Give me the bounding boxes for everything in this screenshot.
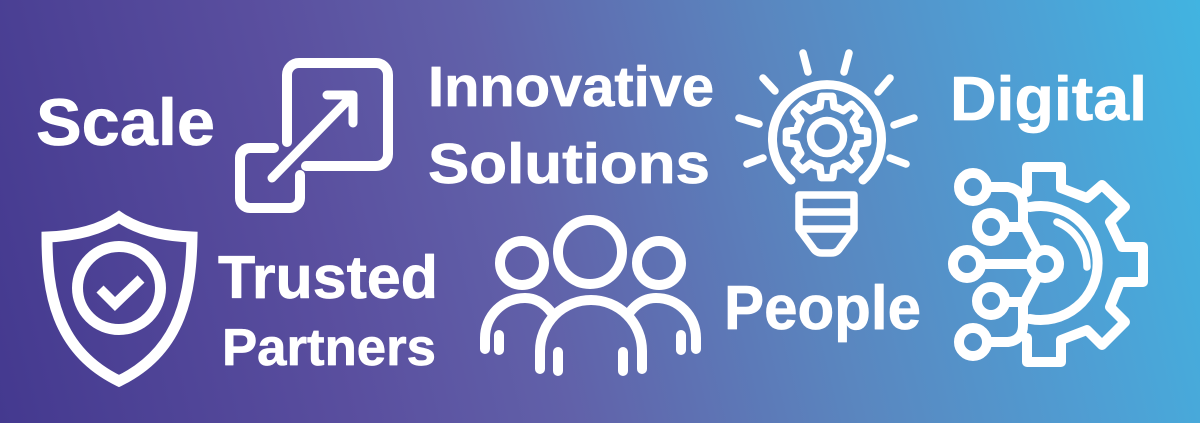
icon: digital gear circuit [953,167,1143,362]
heading: Scale: Scale [36,85,215,159]
heading: People: People [724,274,921,343]
heading: Trusted Partners: Trusted [218,244,438,311]
icon: three people [485,220,696,371]
heading: Digital: Digital [950,65,1147,134]
heading: Trusted Partners: Partners [222,319,436,377]
icon: shield with check [47,217,192,381]
icon: light bulb with gear [739,53,914,253]
heading: Innovative Solutions: Innovative [428,55,714,119]
icon: scale arrow squares [240,63,388,208]
heading: Innovative Solutions [428,55,714,196]
heading: Trusted Partners [218,244,438,377]
heading: Innovative Solutions: Solutions [428,132,710,196]
